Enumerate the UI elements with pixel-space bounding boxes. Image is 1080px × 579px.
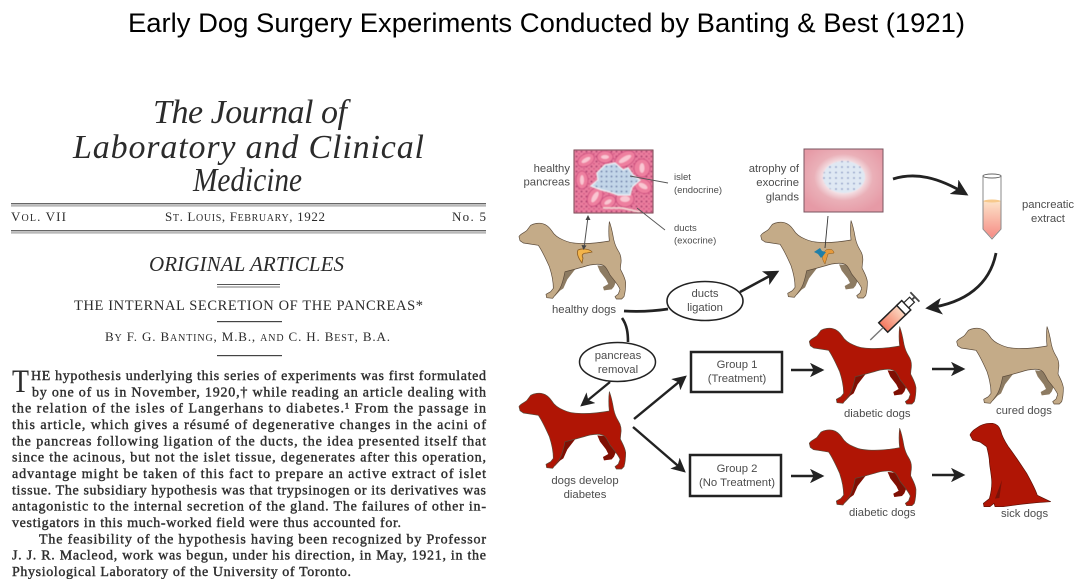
article title: THE INTERNAL SECRETION OF THE PANCREAS* [74, 298, 423, 314]
label: atrophy of exocrine glands: atrophy of [749, 163, 799, 175]
article body text: by one of us in November, 1920,† while reading an article dealing with [32, 385, 486, 400]
article body text: advantage might be taken of this fact to prepare an active extract of islet [12, 467, 486, 482]
issue line: No. 5 [452, 209, 486, 224]
arrow: extract to syringe [928, 253, 996, 308]
label: diabetic dogs untreated: diabetic dogs [849, 507, 916, 519]
authors: BY F. G. BANTING, M.B., AND C. H. BEST, B.A. [105, 329, 390, 344]
journal masthead: Laboratory and Clinical [72, 129, 424, 166]
arrow: pancreas to extract [893, 176, 966, 194]
arrow: to group 1 [634, 377, 685, 419]
node: pancreas removal: removal [598, 364, 638, 376]
article body text [12, 364, 486, 579]
icon: syringe [866, 292, 919, 345]
icon: cured dog [957, 327, 1063, 404]
panel: experiment diagram [519, 147, 1074, 520]
label: healthy pancreas: healthy [534, 163, 570, 175]
article body text: J. J. R. Macleod, work was begun, under his direction, in May, 1921, in the [12, 549, 486, 564]
label: atrophy of exocrine glands: exocrine [756, 177, 799, 189]
article body text: HE hypothesis underlying this series of experiments was first formulated [31, 369, 486, 384]
node: group 1 [691, 352, 782, 392]
callout: islet [630, 172, 722, 196]
node: ducts ligation: ducts [691, 288, 719, 300]
icon: healthy dog [519, 215, 626, 299]
node: group 1: Group 1 [717, 359, 757, 371]
article body text: since the acinous, but not the islet tissue, degenerates after this operation, [12, 451, 486, 466]
label: diabetic dogs treated: diabetic dogs [844, 408, 911, 420]
label: dogs develop diabetes: dogs develop [551, 475, 619, 487]
article body text: the relation of the isles of Langerhans to diabetes.¹ From the passage in [12, 402, 486, 417]
arrow: group 2 to diabetic dogs [791, 475, 822, 477]
journal masthead: The Journal of [153, 94, 352, 131]
article body text: The feasibility of the hypothesis having been recognized by Professor [39, 532, 486, 547]
image: atrophied pancreas histology [804, 149, 883, 212]
node: group 1: (Treatment) [708, 373, 767, 385]
article body text: the pancreas following ligation of the ducts, the idea presented itself that [12, 434, 486, 449]
node: pancreas removal: pancreas [595, 350, 641, 362]
arrow: group 1 to diabetic dogs [791, 369, 822, 371]
node: group 2: (No Treatment) [699, 477, 775, 489]
arrow: to group 2 [633, 427, 684, 471]
node: ducts ligation [667, 282, 743, 320]
issue line [11, 203, 486, 233]
node: group 2 [690, 455, 781, 496]
label: atrophy of exocrine glands: glands [766, 192, 799, 204]
node: pancreas removal [580, 342, 656, 382]
callout: islet: islet [674, 172, 691, 183]
icon: sick sitting dog [970, 423, 1051, 507]
journal masthead: Medicine [192, 162, 302, 199]
callout: ducts: (exocrine) [674, 236, 716, 246]
panel: journal page [11, 94, 486, 579]
label: pancreatic extract: pancreatic [1022, 199, 1074, 211]
label: healthy dogs: healthy dogs [552, 304, 616, 316]
article body text: vestigators in this much-worked field were thus accounted for. [12, 516, 401, 531]
icon: diabetic dog untreated [809, 428, 916, 506]
arrow: to sick dogs [932, 474, 963, 476]
icon: test tube with pancreatic extract [983, 174, 1001, 239]
icon: ligated dog [761, 216, 867, 298]
article body text: tissue. The subsidiary hypothesis was that trypsinogen or its derivatives was [12, 483, 486, 498]
article body text: T [12, 364, 29, 400]
arrow: healthy dogs to pancreas removal [622, 318, 628, 342]
label: healthy pancreas: pancreas [524, 176, 570, 188]
label: dogs develop diabetes: diabetes [564, 489, 607, 501]
icon: diabetic dog [519, 392, 626, 469]
section heading: ORIGINAL ARTICLES [149, 252, 344, 276]
journal masthead [72, 94, 424, 199]
callout: ducts: ducts [674, 223, 697, 234]
callout: islet: (endocrine) [674, 185, 722, 196]
callout: ducts [637, 208, 716, 246]
title: Early Dog Surgery Experiments Conducted by Banting & Best (1921) [128, 8, 965, 38]
issue line: ST. LOUIS, FEBRUARY, 1922 [165, 209, 325, 224]
article body text: antagonistic to the internal secretion of the gland. The failures of other in- [12, 500, 486, 515]
label: cured dogs: cured dogs [996, 405, 1052, 417]
image: healthy pancreas histology [574, 147, 654, 213]
issue line: VOL. VII [11, 209, 66, 224]
label: sick dogs: sick dogs [1001, 508, 1048, 520]
arrow: to cured dogs [932, 368, 963, 370]
arrow: removal to diabetic dog [582, 382, 610, 405]
node: group 2: Group 2 [717, 463, 757, 475]
node: ducts ligation: ligation [687, 302, 723, 314]
arrow: healthy dogs to ducts ligation [624, 272, 777, 311]
label: pancreatic extract: extract [1031, 213, 1066, 225]
icon: diabetic dog treated [809, 327, 916, 404]
article body text: this article, which gives a résumé of degenerative changes in the acini of [12, 418, 486, 433]
